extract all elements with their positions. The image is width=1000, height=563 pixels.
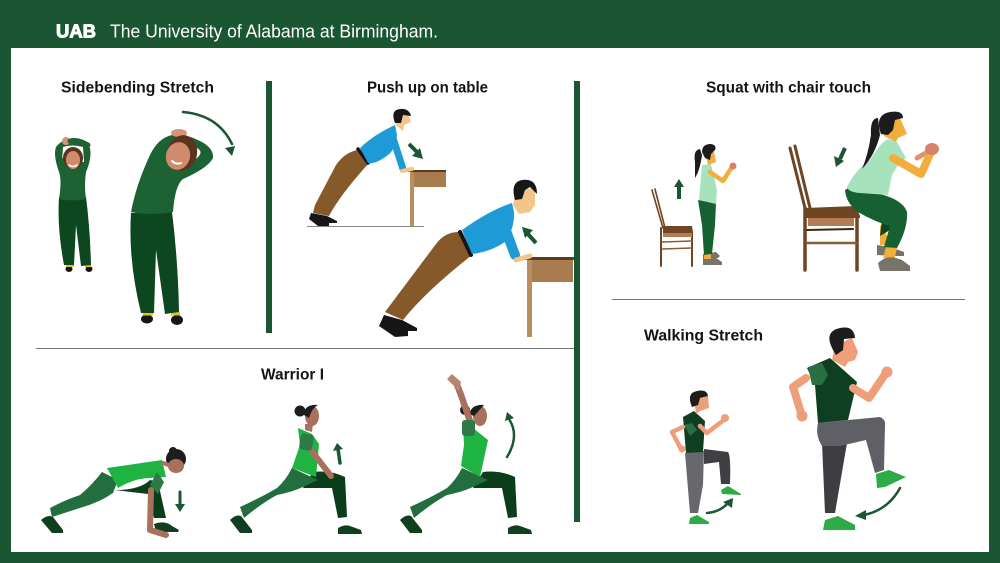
figure: man at table, arms bent xyxy=(309,109,412,226)
arrow: down toward table xyxy=(409,144,423,159)
table: small xyxy=(407,170,446,226)
table: large xyxy=(523,257,574,337)
figure: man stepping, large xyxy=(793,327,906,530)
figure: hands down lunge xyxy=(41,447,186,535)
figure: lunge, arm raised xyxy=(400,374,532,534)
arrow: down xyxy=(175,492,185,512)
arrow: curved up xyxy=(505,412,514,457)
figure: man at table, arms extended xyxy=(379,180,537,337)
heading: warrior I: Warrior I xyxy=(261,366,324,384)
chair: large xyxy=(790,146,860,270)
panel: push up on table xyxy=(307,80,574,337)
panel: walking stretch xyxy=(644,327,906,530)
heading: walking stretch: Walking Stretch xyxy=(644,328,763,344)
arrow: up xyxy=(674,179,684,199)
heading: squat with chair touch: Squat with chair touch xyxy=(706,80,871,96)
heading: sidebending stretch: Sidebending Stretch xyxy=(61,80,214,96)
figure: man stepping, small xyxy=(672,391,741,524)
panel: squat with chair touch xyxy=(652,80,939,271)
figure: woman standing with arms overhead xyxy=(55,137,92,272)
arrow: up xyxy=(333,443,343,463)
arrow: diagonal down xyxy=(834,148,845,167)
arrow: curved back xyxy=(855,488,900,520)
arrow: up from table xyxy=(522,227,536,243)
figure: woman standing xyxy=(695,144,736,265)
header logo: UAB xyxy=(56,20,96,42)
figure: woman squatting xyxy=(845,112,939,271)
panel: sidebending stretch xyxy=(55,80,235,325)
header logo: The University of Alabama at Birmingham. xyxy=(110,20,438,42)
panel: warrior I xyxy=(41,366,532,535)
figure: woman bending sideways xyxy=(130,129,213,325)
floor line xyxy=(307,226,424,227)
chair: small xyxy=(652,189,693,266)
arrow: bend direction xyxy=(183,112,235,156)
figure: lunge, hands on knee xyxy=(230,405,362,534)
arrow: curved forward xyxy=(707,498,733,513)
heading: push up on table: Push up on table xyxy=(367,80,488,96)
